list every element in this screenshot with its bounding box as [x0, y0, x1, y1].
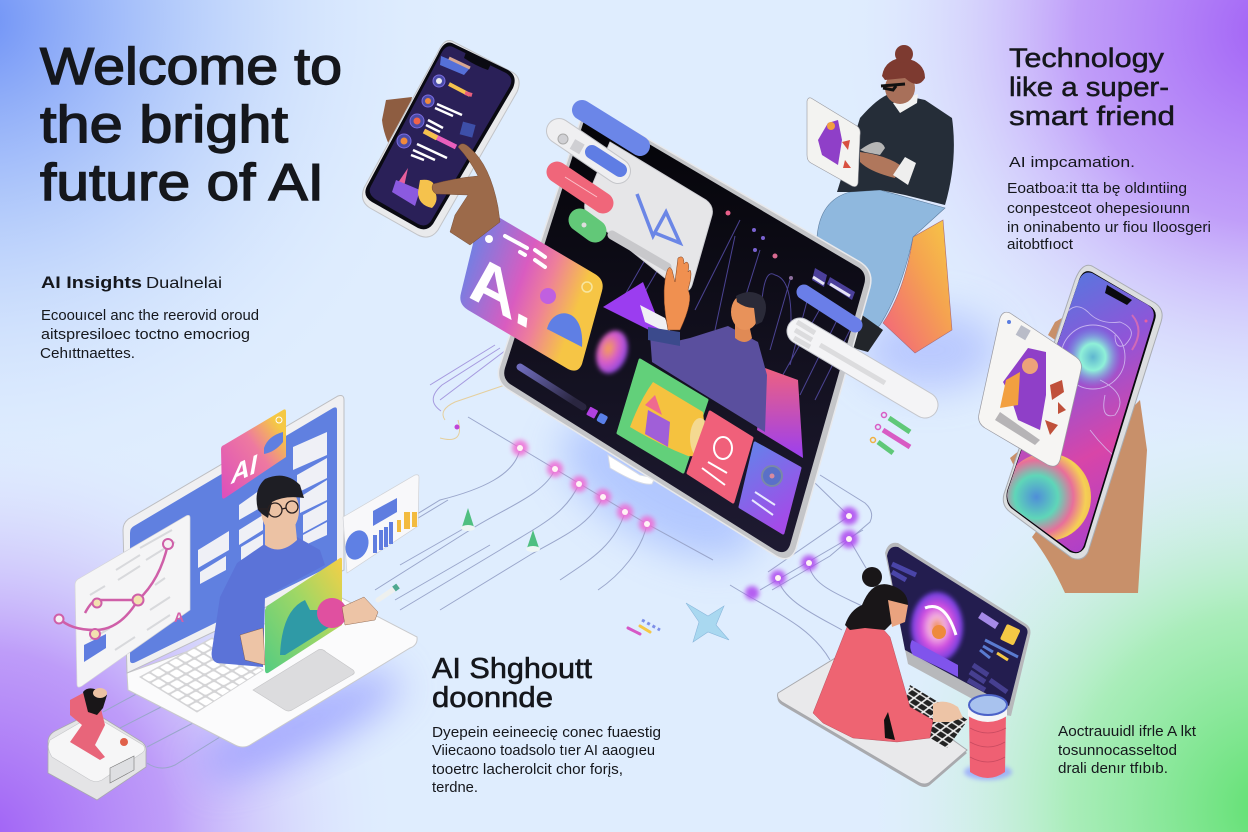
figure [70, 692, 105, 760]
glowing data nodes [454, 424, 858, 600]
hand and cup [860, 142, 885, 155]
bar chart panel [342, 475, 419, 573]
hair [882, 58, 925, 84]
notch [464, 52, 491, 70]
neon lines on screen [622, 215, 850, 400]
red tumbler [964, 695, 1012, 780]
line chart panel [54, 515, 190, 687]
shoe [850, 315, 883, 352]
laptop screen [130, 407, 337, 663]
phone display [1007, 272, 1154, 552]
hand gripping phone [432, 144, 500, 245]
text block: AI Shghoutt doonnde: Viiecaono toadsolo tıer AI aaogıeu [432, 743, 655, 759]
phone body [362, 40, 519, 237]
text block: AI Insights Dualnelai: Dualnelai [146, 275, 222, 292]
glasses [881, 84, 905, 90]
display glowing swirl [910, 592, 963, 677]
white VA card [585, 142, 712, 291]
jeans [817, 190, 945, 345]
colored tick marks [870, 412, 910, 453]
red pill [557, 172, 603, 203]
keyboard [140, 638, 263, 712]
icon: star shape and small dashes [628, 603, 729, 642]
head [885, 72, 915, 104]
purple triangle [603, 282, 660, 330]
text block: AI impcamation: aitobtfıoct [1007, 237, 1073, 253]
laptop base [127, 597, 417, 747]
text block: bottom right note: tosunnocasseltod [1058, 743, 1177, 759]
AI gradient card [221, 409, 286, 499]
screen lid [885, 543, 1030, 716]
green image tile [618, 360, 707, 472]
display [887, 547, 1028, 706]
slider bar [520, 367, 583, 407]
floating character card [979, 312, 1081, 466]
heading: Technology like a super-smart friend: like a super- [1009, 72, 1169, 102]
glowing sphere [593, 327, 631, 377]
gradient pink triangle panel [757, 368, 803, 458]
title: Welcome to the bright future of AI [40, 38, 342, 212]
box [48, 714, 146, 800]
text block: AI Shghoutt doonnde: AI Shghoutt [432, 653, 592, 685]
title: Welcome to the bright future of AI: future of AI [40, 154, 324, 212]
gradient green card [265, 558, 347, 673]
network of connection lines [103, 345, 872, 768]
text block: AI Insights Dualnelai [40, 273, 259, 362]
white long pill [794, 322, 925, 405]
blue right pill [804, 292, 855, 325]
phone body [1003, 265, 1162, 559]
display UI [892, 564, 1021, 692]
keyboard [900, 685, 968, 748]
stool [883, 220, 952, 353]
phone list rows [392, 56, 476, 208]
top left phone with hand [362, 40, 519, 245]
hand behind [1032, 400, 1147, 593]
text block: AI Insights Dualnelai: Ecoouıcel anc the reerovid oroud [41, 308, 259, 324]
card logo letter: A. [467, 239, 537, 344]
left laptop scene [48, 396, 419, 800]
tile artwork [630, 382, 706, 456]
sweater [837, 93, 954, 205]
screen rows [198, 432, 327, 584]
text block: bottom right note: drali denır tfıbıb. [1058, 761, 1168, 777]
seated figure on white box [48, 688, 146, 800]
text block: AI impcamation: AI impcamation. [1009, 155, 1135, 171]
tablet frame [498, 103, 871, 559]
text block: AI impcamation [1007, 155, 1211, 253]
base [778, 660, 967, 787]
right phone with hand [979, 265, 1165, 593]
bottom right laptop scene [778, 543, 1030, 787]
tablet screen [504, 122, 865, 552]
heading: Technology like a super-smart friend: Technology [1009, 43, 1165, 73]
raised orange hand and sleeve [648, 257, 691, 346]
text block: AI impcamation: conpestceot ohepesioıunn [1007, 201, 1190, 217]
main tablet [460, 100, 925, 565]
person with glasses [212, 476, 325, 667]
text block: AI Shghoutt doonnde: Dyepein eeineecię conec fuaestig [432, 725, 661, 741]
line chart panel: A [174, 609, 184, 625]
text block: AI Shghoutt doonnde: doonnde [432, 682, 553, 714]
gradient A card [460, 211, 603, 371]
text block: AI impcamation: in oninabento ur fiou Iloosgeri [1007, 220, 1211, 236]
fingers behind phone [382, 97, 412, 165]
icon: small green trees [461, 508, 540, 552]
trackpad [253, 649, 354, 711]
text block: bottom right note: Aoctrauuidl ifrle A lkt [1058, 724, 1196, 740]
AI gradient card: AI [230, 448, 258, 490]
pointing hand and pen [342, 597, 378, 625]
text block: bottom right note [1058, 724, 1196, 777]
heading: Technology like a super-smart friend: smart friend [1009, 101, 1175, 131]
blue top pill [582, 110, 640, 146]
seated person with tablet [807, 45, 954, 353]
white list pill [558, 131, 620, 171]
collar [893, 94, 918, 113]
blue tile [740, 443, 800, 533]
title: Welcome to the bright future of AI: the bright [40, 96, 289, 154]
reading card [807, 98, 860, 187]
laptop lid [123, 396, 344, 673]
text block: AI Insights Dualnelai: Cehıttnaettes. [40, 346, 135, 362]
title: Welcome to the bright future of AI: Welcome to [40, 38, 342, 96]
green pill [580, 220, 595, 231]
person on tablet [650, 292, 767, 432]
text block: AI Insights Dualnelai: AI Insights [41, 273, 142, 292]
text block: AI Insights Dualnelai: aitspresiloec toctno emocriog [41, 327, 250, 343]
small top right panel [812, 268, 827, 287]
text block: AI Shghoutt doonnde: tooetrc lacherolcit chor forįs, [432, 762, 623, 778]
tablet stand [608, 455, 655, 484]
text block: AI Shghoutt doonnde: terdne. [432, 780, 478, 796]
heading: Technology like a super-smart friend [1009, 43, 1175, 131]
text block: AI Shghoutt doonnde [432, 653, 661, 796]
text block: AI impcamation: Eoatboa:it tta bę oldıntiing [1007, 181, 1187, 197]
person in red jacket [813, 567, 963, 742]
phone screen [370, 46, 511, 225]
red tile [688, 412, 752, 502]
icon: VA logo [637, 194, 680, 243]
